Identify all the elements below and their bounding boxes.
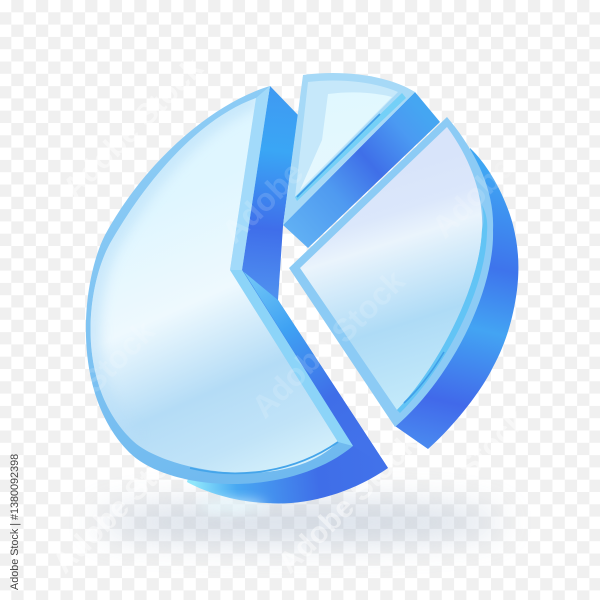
- top slice glass rim: [283, 73, 415, 225]
- right slice glass face: [300, 127, 482, 410]
- watermarks: Adobe: [214, 154, 310, 250]
- pie slice: top wedge: [283, 73, 440, 248]
- watermarks: Stock: [74, 313, 162, 400]
- faint background watermarks: [47, 52, 533, 580]
- left slice straight rim highlight: [230, 86, 270, 270]
- faint background watermarks: Adobe Stock: [272, 427, 425, 580]
- watermarks: Adobe: [424, 149, 520, 245]
- left slice cut rim highlight: [230, 270, 353, 446]
- pie slice: large left: [86, 86, 388, 503]
- left slice soft inner band: [91, 98, 256, 441]
- top slice cut dark line: [297, 114, 380, 197]
- left slice bottom inner line: [190, 442, 338, 473]
- faint background watermarks: Adobe Stock: [47, 427, 200, 580]
- top slice glass face: [295, 80, 398, 197]
- left slice glass rim: [86, 86, 353, 484]
- top slice side wall: [283, 92, 440, 248]
- right slice bottom inner line: [404, 352, 444, 403]
- watermarks: [74, 149, 520, 425]
- pie slice: right: [289, 117, 518, 449]
- left slice glass face: [91, 98, 338, 473]
- faint background watermarks: Adobe Stock: [57, 52, 210, 205]
- left slice lower side wall: [187, 272, 388, 503]
- left slice side wall: [240, 86, 300, 340]
- top slice inner face: [300, 92, 392, 190]
- bottom glow: [198, 500, 266, 512]
- faint background watermarks: Stock: [452, 404, 533, 485]
- right slice outer side wall: [395, 148, 518, 449]
- right slice glass rim: [289, 117, 493, 427]
- top slice cut highlight: [295, 93, 406, 201]
- watermarks: Adobe: [244, 329, 340, 425]
- ground shadow: [95, 502, 505, 542]
- right slice arc highlight: [397, 205, 487, 413]
- watermarks: Stock: [324, 263, 412, 350]
- left slice cut-edge side wall: [244, 272, 388, 468]
- stock id caption: Adobe Stock | #1380092398: [9, 454, 21, 590]
